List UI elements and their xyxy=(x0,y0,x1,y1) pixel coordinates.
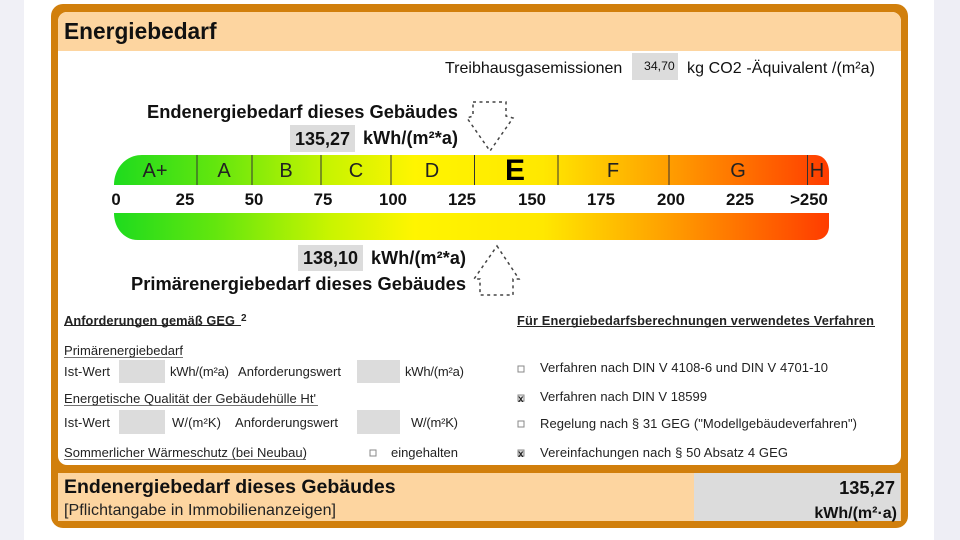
header band xyxy=(58,12,901,51)
scale numbers: 50 xyxy=(245,190,263,209)
upper energy scale bar xyxy=(114,154,829,187)
calculation method block xyxy=(517,313,875,460)
bottom value box: kWh/(m²·a) xyxy=(814,505,897,522)
scale numbers: 100 xyxy=(379,190,407,209)
requirements heading: Anforderungen gemäß GEG xyxy=(64,313,235,328)
primary energy heading and value: 138,10 xyxy=(303,248,358,268)
greenhouse gas emissions row: Treibhausgasemissionen xyxy=(445,60,622,77)
envelope quality row: W/(m²K) xyxy=(411,415,458,430)
scale class letters: G xyxy=(730,160,746,182)
icon: dashed arrow down xyxy=(467,102,513,151)
greenhouse gas emissions row: 34,70 xyxy=(644,59,675,73)
envelope quality row: Energetische Qualität der Gebäudehülle Ht' xyxy=(64,391,316,406)
envelope quality row: Anforderungswert xyxy=(235,415,338,430)
scale numbers: 75 xyxy=(314,190,332,209)
primary energy row: Anforderungswert xyxy=(238,364,341,379)
primary energy row: Primärenergiebedarf xyxy=(64,343,183,358)
option: DIN V 18599: x xyxy=(518,394,524,405)
primary energy row xyxy=(64,343,464,383)
scale numbers: 25 xyxy=(176,190,194,209)
scale class dividers xyxy=(197,155,808,185)
scale numbers: >250 xyxy=(790,190,828,209)
scale class letters: H xyxy=(810,160,824,182)
scale numbers: 125 xyxy=(448,190,476,209)
final energy demand heading and value: kWh/(m²*a) xyxy=(363,128,458,148)
final energy demand heading and value: 135,27 xyxy=(295,129,350,149)
bottom value box xyxy=(694,473,900,522)
scale numbers xyxy=(111,190,828,209)
lower energy scale bar xyxy=(114,213,829,240)
envelope quality row: Ist-Wert xyxy=(64,415,110,430)
scale class letters: B xyxy=(279,160,293,182)
scale numbers: 225 xyxy=(726,190,754,209)
requirements block xyxy=(64,313,464,460)
scale numbers: 0 xyxy=(111,190,121,209)
primary energy row: kWh/(m²a) xyxy=(405,364,464,379)
final energy demand heading and value: Endenergiebedarf dieses Gebäudes xyxy=(147,101,458,122)
primary energy row: Ist-Wert xyxy=(64,364,110,379)
summer heat protection row xyxy=(64,445,458,460)
bottom band: final energy demand: Endenergiebedarf dieses Gebäudes xyxy=(64,476,396,498)
summer heat protection row: eingehalten xyxy=(391,445,458,460)
option: Modellgebäudeverfahren: Regelung nach § 31 GEG ("Modellgebäudeverfahren") xyxy=(540,416,857,431)
scale numbers: 200 xyxy=(657,190,685,209)
option: DIN V 4108-6: Verfahren nach DIN V 4108-6 und DIN V 4701-10 xyxy=(540,360,828,375)
summer heat protection row: Sommerlicher Wärmeschutz (bei Neubau) xyxy=(64,445,307,460)
scale class letters: A xyxy=(217,160,231,182)
icon: dashed arrow up xyxy=(474,246,519,295)
scale class letters: A+ xyxy=(142,160,168,182)
scale class letters xyxy=(142,154,824,187)
greenhouse gas emissions row xyxy=(445,53,875,80)
option: DIN V 18599: Verfahren nach DIN V 18599 xyxy=(540,389,707,404)
bottom value box: 135,27 xyxy=(839,477,895,498)
method heading: Für Energiebedarfsberechnungen verwendetes Verfahren xyxy=(517,313,874,328)
scale class letters: D xyxy=(425,160,439,182)
scale numbers: 175 xyxy=(587,190,615,209)
scale class letters: C xyxy=(349,160,363,182)
primary energy row: kWh/(m²a) xyxy=(170,364,229,379)
scale numbers: 150 xyxy=(518,190,546,209)
option: Vereinfachungen: Vereinfachungen nach § 50 Absatz 4 GEG xyxy=(540,445,788,460)
title: Energiebedarf xyxy=(64,18,217,44)
primary energy heading and value: Primärenergiebedarf dieses Gebäudes xyxy=(131,273,466,294)
final energy demand heading and value xyxy=(147,101,458,152)
envelope quality row: W/(m²K) xyxy=(172,415,221,430)
scale class letters: F xyxy=(607,160,619,182)
bottom band: final energy demand: [Pflichtangabe in Immobilienanzeigen] xyxy=(64,502,336,519)
requirements heading: 2 xyxy=(241,313,247,324)
primary energy heading and value xyxy=(131,245,466,294)
option: Vereinfachungen: x xyxy=(518,449,524,460)
greenhouse gas emissions row: kg CO2 -Äquivalent /(m²a) xyxy=(687,59,875,77)
primary energy heading and value: kWh/(m²*a) xyxy=(371,248,466,268)
scale class letters: E xyxy=(505,154,525,187)
bottom band: final energy demand xyxy=(64,476,396,519)
envelope quality row xyxy=(64,391,458,434)
